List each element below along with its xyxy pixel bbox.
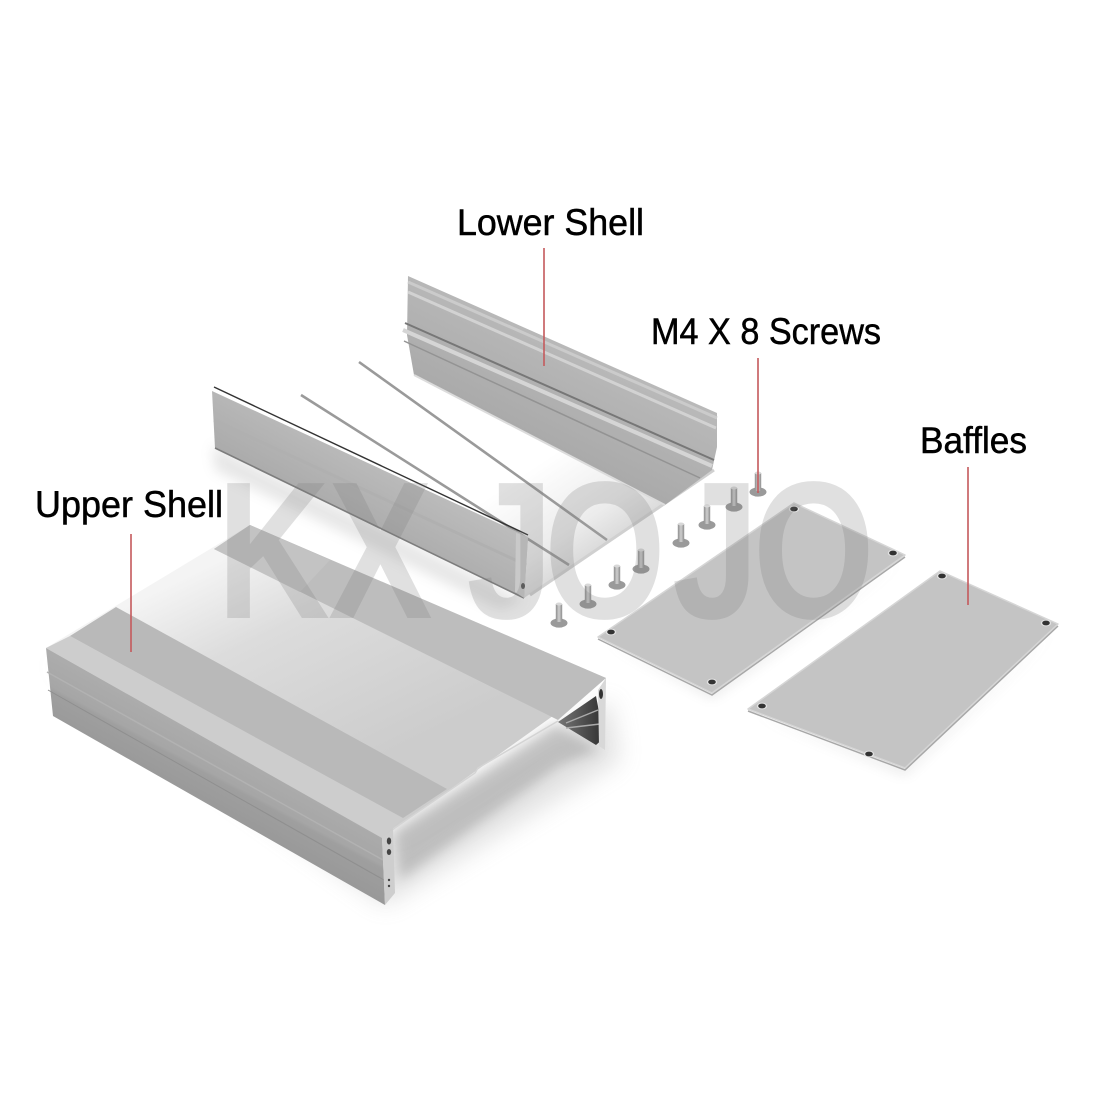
watermark: X (328, 440, 433, 660)
lower shell (212, 276, 717, 598)
upper shell (46, 525, 606, 905)
label: screws: M4 X 8 Screws (651, 311, 881, 352)
screws (550, 472, 766, 628)
top band near front (70, 607, 447, 818)
label: upper shell: Upper Shell (35, 484, 223, 525)
side face (46, 648, 385, 905)
top band near back (214, 525, 606, 720)
front wall (212, 387, 528, 598)
front end face (382, 829, 395, 905)
lower shell floor (215, 375, 714, 598)
leader line: upper shell (130, 534, 132, 652)
top face (46, 525, 606, 838)
baffle two (748, 571, 1058, 770)
interior of far end (558, 696, 604, 745)
notched edge (393, 721, 558, 829)
label: baffles: Baffles (920, 420, 1027, 461)
watermark: O (753, 440, 875, 660)
rail strips (301, 362, 607, 565)
watermark: K (217, 440, 330, 660)
watermark: O (544, 440, 666, 660)
light strip at front of top face (46, 636, 403, 838)
leader line: lower shell (543, 248, 545, 366)
leader line: baffles (967, 467, 969, 605)
floor front edge (530, 470, 714, 595)
label: lower shell: Lower Shell (457, 202, 644, 243)
ground shadows (46, 445, 1058, 905)
leader line: screws (757, 358, 759, 493)
baffle one (598, 503, 905, 695)
back wall (403, 276, 717, 505)
watermark (217, 440, 875, 660)
watermark: J (466, 440, 554, 660)
watermark: J (672, 440, 759, 660)
